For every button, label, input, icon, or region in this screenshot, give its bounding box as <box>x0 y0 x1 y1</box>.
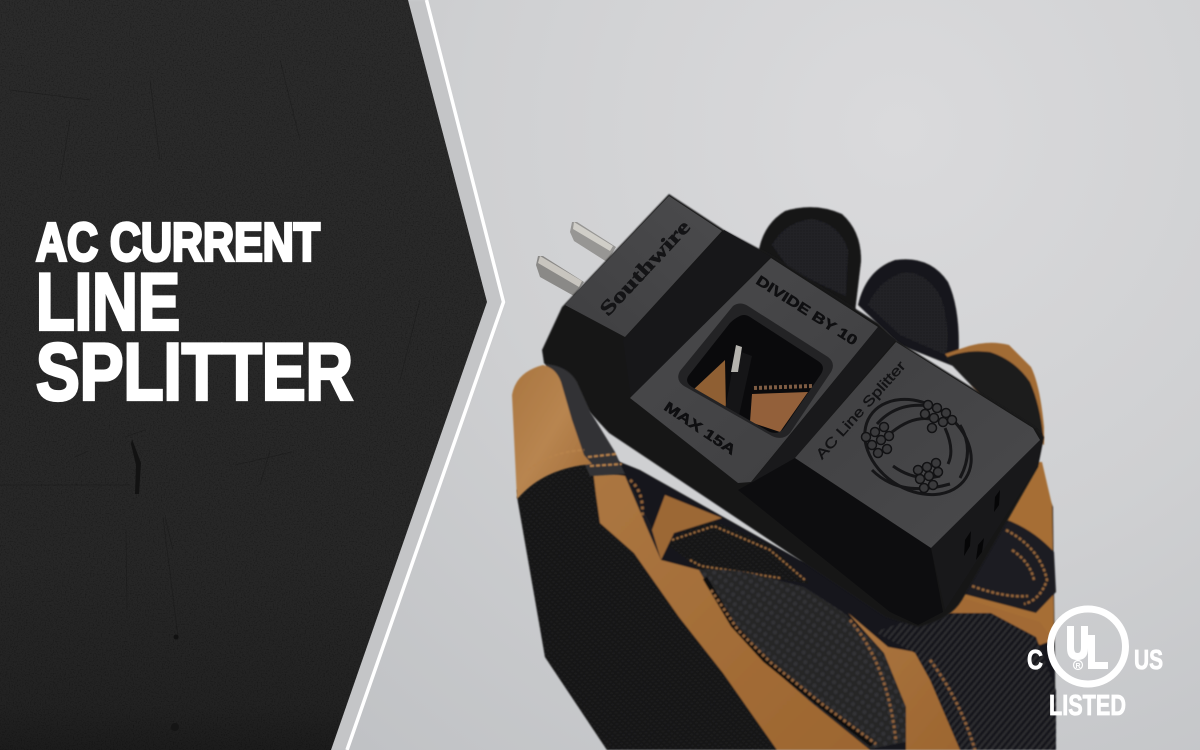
glove: palm and thumb <box>517 450 1056 750</box>
device body silhouette <box>542 194 1044 627</box>
chevron outline band and white line <box>327 0 505 750</box>
lower front face <box>738 458 943 625</box>
plug blades <box>536 222 616 296</box>
LISTED caption: LISTED <box>1049 690 1126 722</box>
letter U <box>1067 626 1088 660</box>
opening showing hand behind <box>687 315 823 433</box>
cable logo emboss <box>847 380 989 514</box>
palm base <box>517 450 1056 750</box>
tan pocket <box>652 495 722 560</box>
tan right of pad <box>848 613 962 750</box>
right tan side <box>930 462 1054 640</box>
title line: LINE: LINE <box>36 258 180 348</box>
finger two <box>858 259 959 368</box>
product: AC line splitter device <box>536 194 1044 627</box>
UL ring <box>1050 609 1126 684</box>
textured middle pad <box>699 569 906 749</box>
middle bridge face <box>630 258 878 483</box>
product: AC line splitter device: AC Line Splitter <box>812 357 909 462</box>
tan band above carbon <box>925 597 1053 645</box>
panel: dark textured chevron <box>0 0 490 750</box>
top end face <box>565 196 722 337</box>
tan thumb <box>512 365 592 499</box>
tan diagonal strip <box>593 470 870 750</box>
black left palm <box>517 460 777 750</box>
glove: fingers behind the device <box>758 207 1044 445</box>
neck channel <box>623 230 771 398</box>
registered mark: R <box>1075 663 1081 670</box>
grey thumb flap <box>546 364 625 476</box>
right carbon section <box>875 613 1056 750</box>
channel before right face <box>751 327 896 483</box>
title line: AC CURRENT: AC CURRENT <box>36 212 320 272</box>
outlet slots <box>964 490 1000 560</box>
US letters: US <box>1134 644 1163 675</box>
right end face <box>931 432 1042 610</box>
thumb stitching <box>528 450 622 470</box>
title line: SPLITTER: SPLITTER <box>36 328 353 418</box>
finger three <box>945 343 1044 445</box>
right black pad <box>960 518 1056 613</box>
embossed lettering: Southwire <box>596 216 695 320</box>
letter L <box>1088 635 1108 669</box>
C letter: C <box>1027 644 1043 675</box>
UL listed mark <box>1027 609 1163 722</box>
dark palm pocket <box>598 470 700 580</box>
square opening bevel <box>678 304 833 438</box>
product: AC line splitter device: MAX 15A <box>661 398 739 458</box>
glove: thumb over device <box>512 364 625 499</box>
palm pad with stitching <box>668 521 810 584</box>
title <box>36 212 353 418</box>
product: AC line splitter device: DIVIDE BY 10 <box>753 272 861 349</box>
finger one <box>758 207 861 312</box>
right top face <box>795 342 1040 548</box>
